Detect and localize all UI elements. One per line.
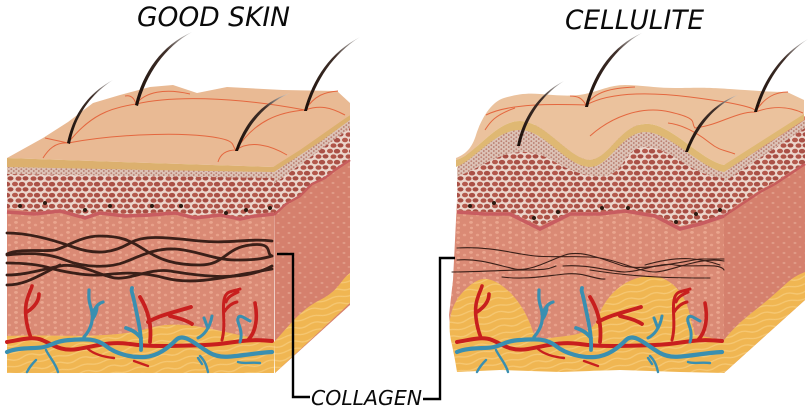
papilla dots — [468, 201, 722, 224]
hairs — [517, 33, 808, 152]
front face: dermis — [449, 200, 724, 345]
tan band — [7, 115, 350, 172]
diagram: good skin block — [7, 32, 360, 373]
skin surface — [456, 85, 804, 165]
surface capillaries — [43, 91, 345, 162]
blood vessels — [457, 286, 722, 372]
hairs — [67, 32, 360, 151]
speckle backing under the skin folds — [457, 125, 724, 180]
label: collagen: COLLAGEN — [311, 386, 422, 410]
diagram: cellulite block — [449, 33, 808, 373]
tan band — [456, 114, 804, 172]
collagen label with brackets — [277, 254, 455, 410]
front face: cell layer — [7, 173, 274, 217]
surface capillaries — [485, 87, 803, 154]
front face: fat layer — [7, 325, 274, 373]
bracket: cellulite — [423, 258, 455, 399]
title: cellulite: CELLULITE — [565, 5, 704, 36]
side face — [724, 116, 805, 373]
front face: cell layer with bulges — [457, 147, 724, 226]
thin collagen fibres — [452, 248, 724, 279]
bracket: good skin — [277, 254, 310, 397]
thick collagen fibres — [7, 233, 272, 285]
title: good skin: GOOD SKIN — [137, 2, 290, 33]
epidermis band — [7, 166, 274, 178]
skin surface — [7, 85, 350, 167]
side face — [274, 118, 350, 373]
front face: dermis — [7, 205, 274, 340]
blood vessels — [7, 286, 272, 372]
papilla dots — [18, 201, 272, 215]
fat lobes and layer — [450, 276, 724, 373]
